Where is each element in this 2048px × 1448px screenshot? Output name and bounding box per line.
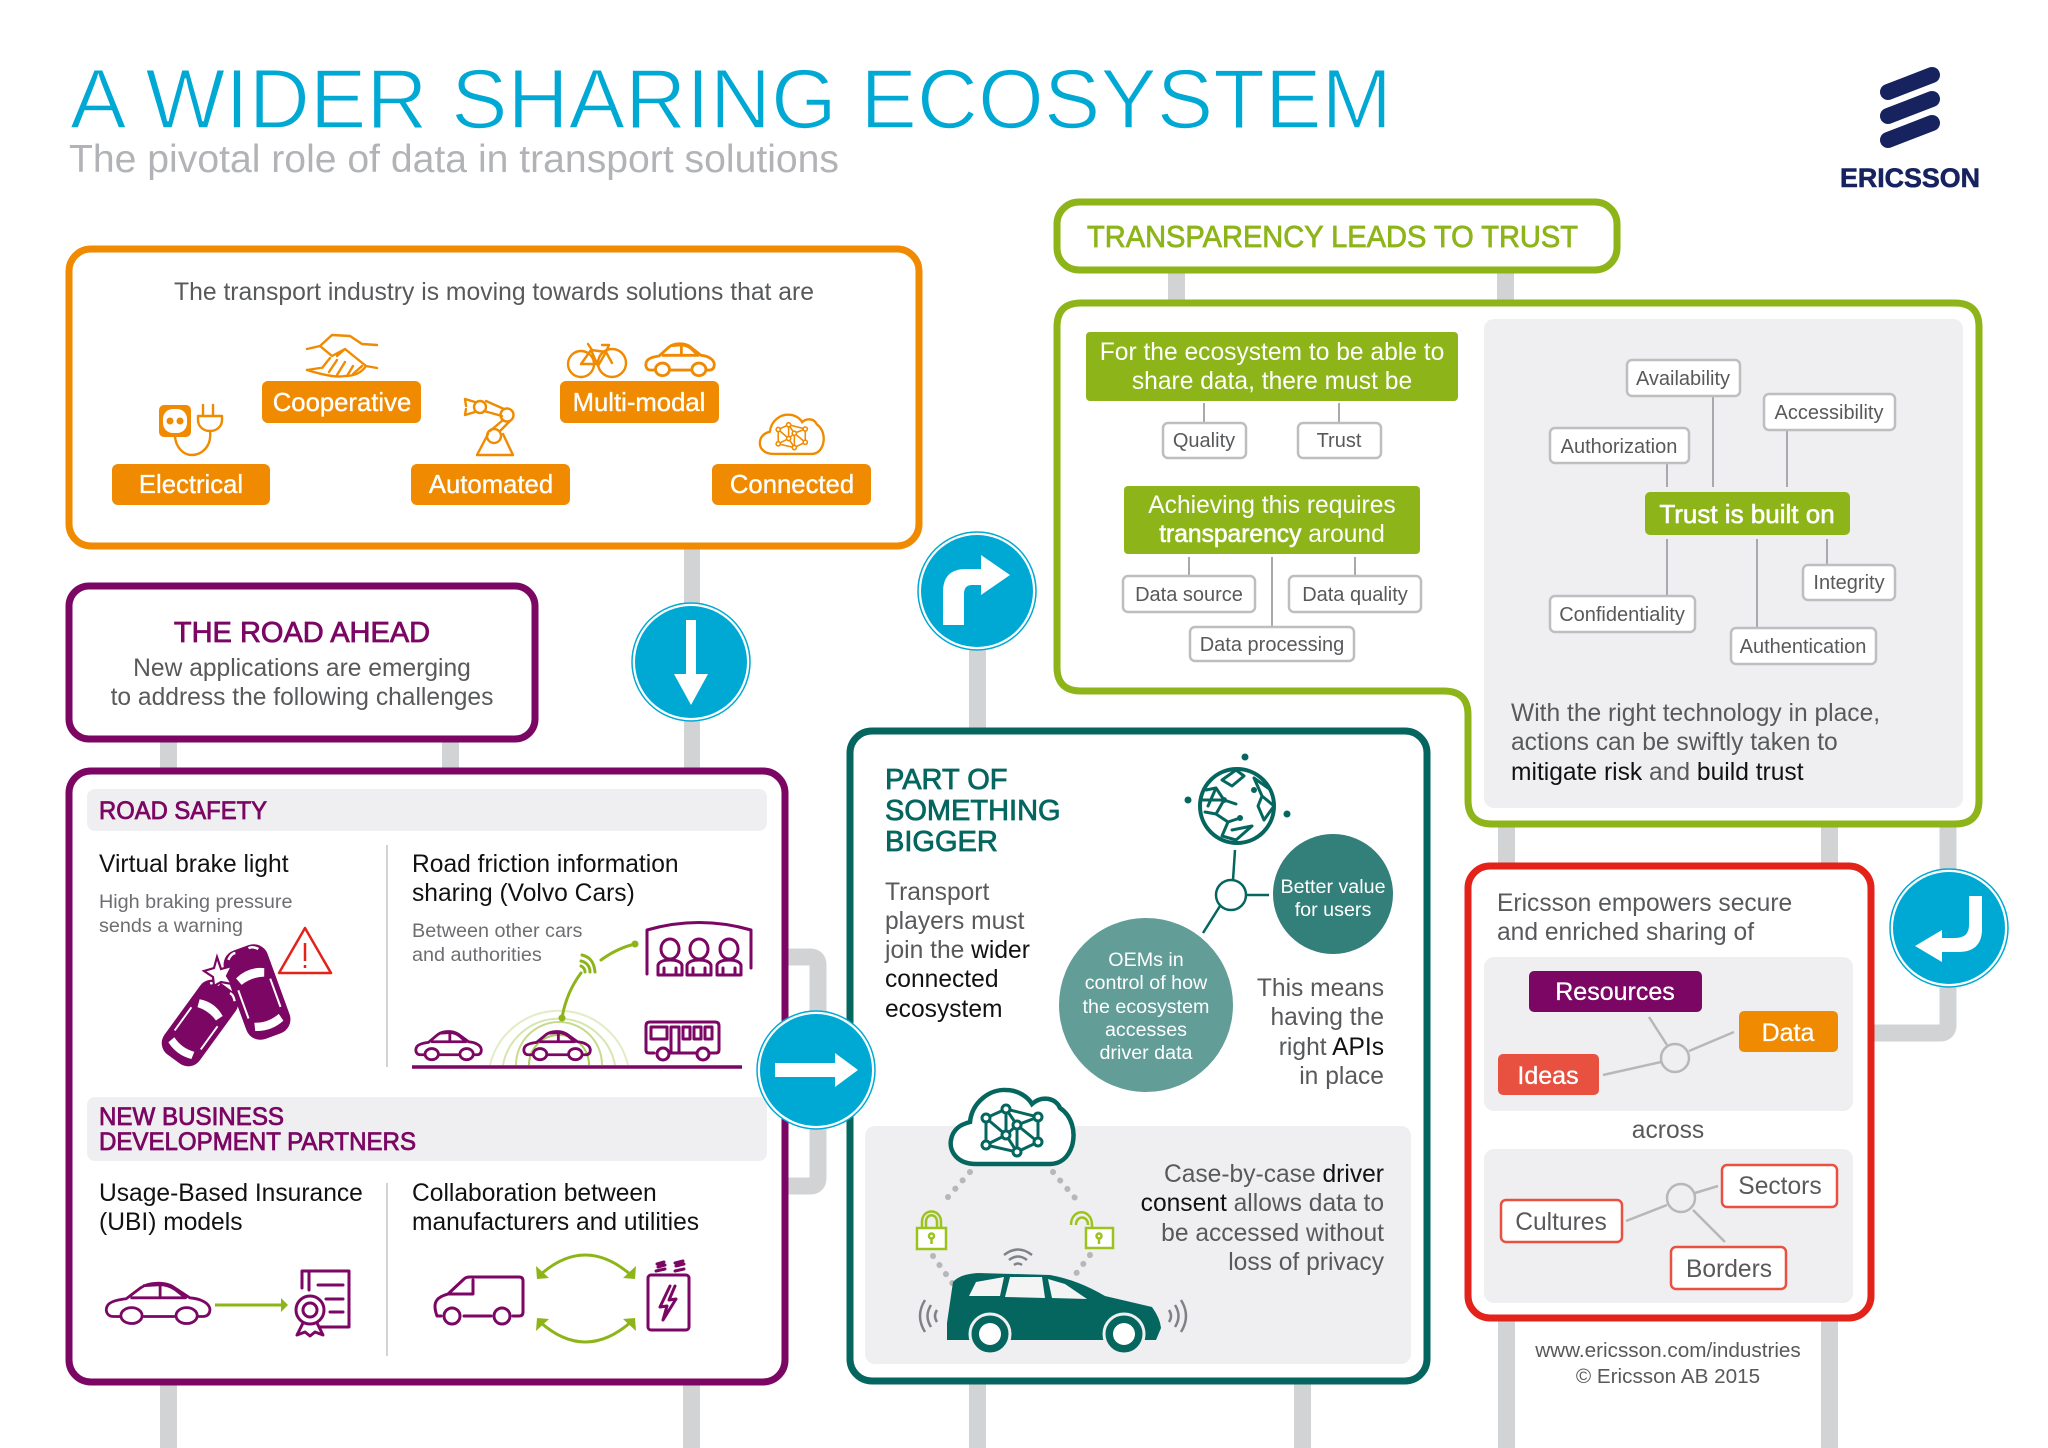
tag: data quality: Data quality bbox=[1302, 584, 1408, 606]
diagram: cultures, sectors, borders bbox=[1484, 1149, 1853, 1303]
heading: PART OF bbox=[885, 764, 1007, 796]
heading: new business development partners bbox=[87, 1097, 767, 1161]
intro text: The transport industry is moving towards solutions that are bbox=[174, 279, 814, 306]
bubble: OEMs: OEMs in bbox=[1108, 949, 1184, 971]
arrow: right sign bbox=[757, 1011, 875, 1129]
button: Cooperative bbox=[262, 381, 421, 423]
tag: quality bbox=[1163, 423, 1246, 458]
button: Connected: Connected bbox=[730, 471, 854, 499]
text: right APIs: right APIs bbox=[1279, 1034, 1384, 1061]
diagram: cultures, sectors, borders: Sectors bbox=[1738, 1173, 1822, 1200]
diagram: cultures, sectors, borders: Borders bbox=[1686, 1256, 1772, 1283]
button: Electrical: Electrical bbox=[139, 471, 243, 499]
diagram: resources, data, ideas: Ideas bbox=[1517, 1062, 1579, 1090]
diagram: cultures, sectors, borders: Cultures bbox=[1515, 1209, 1607, 1236]
panel: trust is built on: Authentication bbox=[1740, 636, 1866, 658]
panel: trust is built on bbox=[1484, 319, 1963, 808]
button: Multi-modal: Multi-modal bbox=[573, 389, 705, 417]
tag: trust bbox=[1298, 423, 1381, 458]
icon: road friction scene bbox=[412, 922, 751, 1067]
text: road friction information: and authorities bbox=[412, 944, 542, 966]
text: collaboration: Collaboration between bbox=[412, 1180, 657, 1207]
box: data sharing requirement: For the ecosystem to be able to bbox=[1100, 339, 1444, 366]
text: right APIs: This means bbox=[1257, 975, 1384, 1002]
heading: BIGGER bbox=[885, 826, 998, 858]
text: driver consent bbox=[1141, 1161, 1385, 1276]
text: transport players: players must bbox=[885, 908, 1025, 935]
text: virtual brake light: sends a warning bbox=[99, 915, 243, 937]
heading panel: the road ahead bbox=[69, 586, 535, 739]
tag: data processing: Data processing bbox=[1200, 634, 1344, 656]
icon: globe network bbox=[1184, 754, 1290, 843]
tag: data quality bbox=[1289, 576, 1421, 612]
panel: trust is built on: Integrity bbox=[1813, 572, 1885, 594]
text: transport players: Transport bbox=[885, 879, 989, 906]
tag: trust: Trust bbox=[1317, 430, 1362, 452]
icon: robot arm bbox=[465, 399, 514, 455]
arrow: return sign bbox=[1890, 869, 2008, 987]
tag: data source: Data source bbox=[1135, 584, 1243, 606]
bubble: better value: for users bbox=[1295, 899, 1371, 921]
text: road friction information: sharing (Volvo Cars) bbox=[412, 880, 635, 907]
text: transport players: ecosystem bbox=[885, 996, 1003, 1023]
text: intro: and enriched sharing of bbox=[1497, 919, 1754, 946]
text: right APIs bbox=[1257, 975, 1384, 1090]
text: driver consent: be accessed without bbox=[1161, 1220, 1384, 1247]
text: driver consent: loss of privacy bbox=[1228, 1249, 1385, 1276]
heading panel: the road ahead: to address the following challenges bbox=[111, 684, 493, 711]
heading: new business development partners: NEW BUSINESS bbox=[99, 1103, 284, 1131]
panel: transparency heading bbox=[1057, 202, 1617, 270]
button: Automated: Automated bbox=[429, 471, 553, 499]
box: transparency: transparency around bbox=[1159, 521, 1385, 548]
tag: data source bbox=[1123, 576, 1255, 612]
panel: road safety and new business partners bbox=[69, 771, 785, 1382]
box: data sharing requirement bbox=[1086, 332, 1458, 401]
diagram: resources, data, ideas: Data bbox=[1762, 1019, 1814, 1047]
text: right technology: actions can be swiftly taken to bbox=[1511, 729, 1838, 756]
box: data sharing requirement: share data, there must be bbox=[1132, 368, 1412, 395]
button: Automated bbox=[411, 464, 570, 505]
button: Electrical bbox=[112, 464, 270, 505]
diagram: resources, data, ideas bbox=[1484, 957, 1853, 1111]
text: transport players bbox=[884, 879, 1030, 1023]
text: usage-based insurance: (UBI) models bbox=[99, 1209, 242, 1236]
icon: plug bbox=[159, 405, 222, 455]
panel: trust is built on: Confidentiality bbox=[1559, 604, 1685, 626]
heading panel: the road ahead: THE ROAD AHEAD bbox=[174, 617, 430, 649]
heading: road safety bbox=[87, 789, 767, 831]
footer: © Ericsson AB 2015 bbox=[1576, 1365, 1760, 1388]
button: Cooperative: Cooperative bbox=[273, 389, 411, 417]
bubble: better value bbox=[1273, 834, 1393, 954]
arrow: turn right sign bbox=[918, 532, 1036, 650]
text: right technology: With the right technology in place, bbox=[1511, 700, 1880, 727]
text: intro bbox=[1497, 890, 1792, 946]
bubble: OEMs bbox=[1059, 918, 1233, 1092]
icon: network cloud bbox=[951, 1090, 1074, 1164]
icon: authorities room bbox=[647, 922, 751, 975]
bubble: OEMs: the ecosystem bbox=[1083, 996, 1209, 1018]
text: intro: Ericsson empowers secure bbox=[1497, 890, 1792, 917]
button: Multi-modal bbox=[560, 381, 719, 423]
text: driver consent: Case-by-case driver bbox=[1164, 1161, 1384, 1188]
bubble: OEMs: accesses bbox=[1105, 1019, 1187, 1041]
Ericsson logo: ERICSSON bbox=[1840, 163, 1980, 193]
text: right APIs: in place bbox=[1299, 1063, 1384, 1090]
subtitle: The pivotal role of data in transport solutions bbox=[69, 138, 839, 181]
panel: trust is built on: Availability bbox=[1636, 368, 1730, 390]
panel: transparency heading: TRANSPARENCY LEADS TO TRUST bbox=[1087, 219, 1578, 254]
heading: road safety: ROAD SAFETY bbox=[99, 797, 267, 825]
connector hub bbox=[1203, 850, 1269, 933]
icon: car to insurance certificate bbox=[106, 1271, 349, 1336]
panel: Ericsson empowers bbox=[1468, 866, 1871, 1318]
bubble: better value: Better value bbox=[1280, 876, 1386, 898]
panel: transport industry solutions bbox=[69, 249, 919, 546]
icon: bicycle and car bbox=[568, 344, 714, 377]
heading: SOMETHING bbox=[885, 795, 1061, 827]
footer: www.ericsson.com/industries bbox=[1534, 1339, 1801, 1362]
heading bbox=[885, 764, 1061, 858]
text: right APIs: having the bbox=[1270, 1004, 1384, 1031]
icon: connected cloud bbox=[760, 415, 824, 454]
bubble: OEMs: driver data bbox=[1099, 1042, 1193, 1064]
text: across: across bbox=[1632, 1117, 1704, 1144]
box: transparency: Achieving this requires bbox=[1148, 492, 1396, 519]
panel: trust is built on: Accessibility bbox=[1775, 402, 1883, 424]
diagram: resources, data, ideas: Resources bbox=[1555, 978, 1675, 1006]
tag: data processing bbox=[1190, 627, 1354, 661]
text: transport players: join the wider bbox=[884, 937, 1030, 964]
icon: van and battery exchange bbox=[435, 1255, 689, 1342]
text: collaboration bbox=[412, 1180, 699, 1236]
panel: driver consent bbox=[865, 1090, 1411, 1364]
text: road friction information: Road friction information bbox=[412, 851, 679, 878]
icon: padlocks bbox=[917, 1212, 1113, 1249]
heading: new business development partners: DEVELOPMENT PARTNERS bbox=[99, 1128, 416, 1156]
heading panel: the road ahead: New applications are emerging bbox=[133, 655, 471, 682]
panel: trust is built on: Authorization bbox=[1561, 436, 1677, 458]
arrow: down sign bbox=[632, 603, 750, 721]
icon: crashing cars with warning bbox=[156, 928, 331, 1072]
road sign posts bbox=[160, 270, 1948, 1448]
text: driver consent: consent allows data to bbox=[1141, 1190, 1384, 1217]
text: usage-based insurance bbox=[99, 1180, 363, 1236]
footer bbox=[1534, 1339, 1801, 1388]
text: virtual brake light: High braking pressure bbox=[99, 891, 293, 913]
text: transport players: connected bbox=[885, 966, 998, 993]
title: A WIDER SHARING ECOSYSTEM bbox=[70, 52, 1392, 146]
Ericsson logo bbox=[1840, 75, 1980, 193]
text: road friction information: Between other cars bbox=[412, 920, 583, 942]
text: collaboration: manufacturers and utilities bbox=[412, 1209, 699, 1236]
text: road friction information bbox=[412, 851, 679, 966]
icon: teal car with signals bbox=[920, 1250, 1186, 1354]
icon: handshake bbox=[307, 335, 377, 377]
box: transparency bbox=[1124, 486, 1420, 554]
panel: trust is built on: Trust is built on bbox=[1659, 499, 1835, 529]
text: virtual brake light bbox=[99, 851, 293, 937]
button: Connected bbox=[712, 464, 871, 505]
text: virtual brake light: Virtual brake light bbox=[99, 851, 289, 878]
panel: transparency leads to trust bbox=[1057, 303, 1979, 824]
panel: part of something bigger bbox=[850, 731, 1427, 1381]
bubble: OEMs: control of how bbox=[1085, 972, 1208, 994]
text: right technology bbox=[1511, 700, 1880, 786]
text: usage-based insurance: Usage-Based Insurance bbox=[99, 1180, 363, 1207]
text: right technology: mitigate risk and build trust bbox=[1511, 759, 1804, 786]
tag: quality: Quality bbox=[1173, 430, 1235, 452]
